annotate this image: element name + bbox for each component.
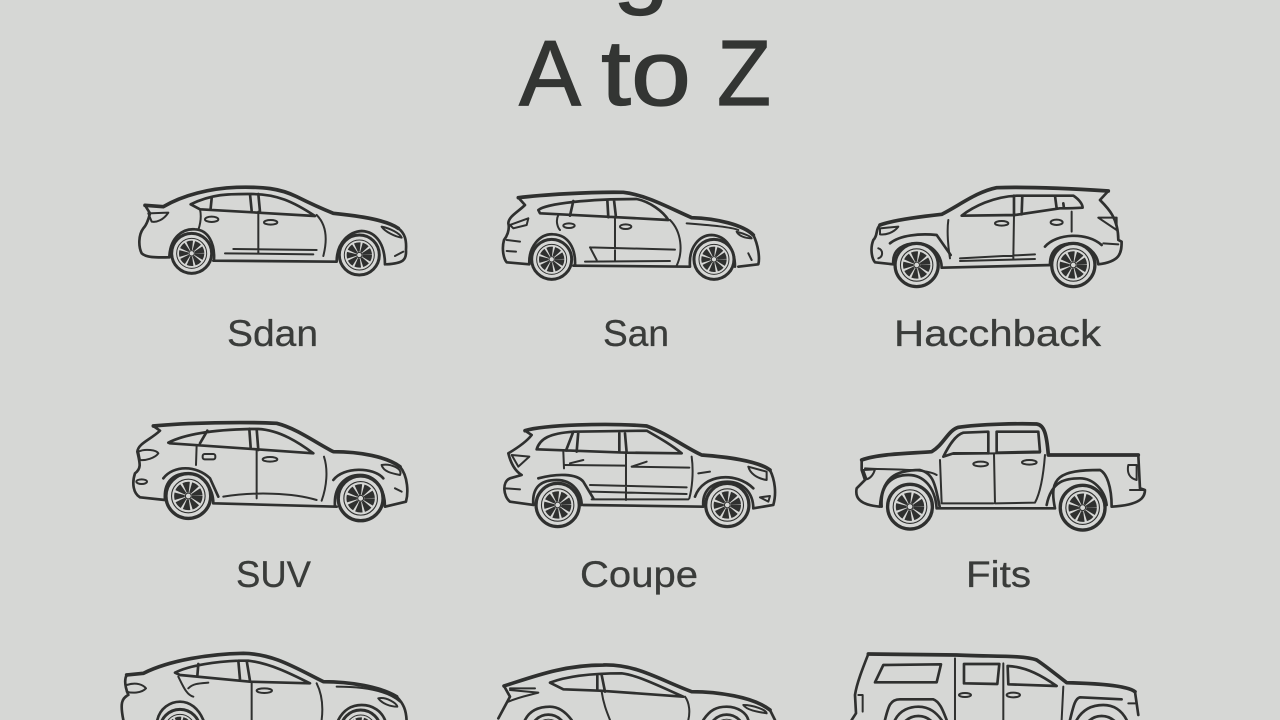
car: bottom middle coupe [498,665,775,720]
label: SUV: SUV [236,554,311,595]
car: sedan [139,187,406,275]
title [519,0,771,125]
label: Fits: Fits [966,554,1031,595]
car: bottom right off-road SUV [852,654,1138,720]
car: wagon [503,192,759,279]
car: bottom left sedan [122,653,407,720]
label: Sdan: Sdan [227,313,318,354]
title: A [519,21,581,125]
car: pickup truck [856,424,1145,530]
label: San: San [603,313,669,354]
title: to [601,21,691,125]
label: Hacchback: Hacchback [894,313,1102,354]
car: large SUV [504,424,775,527]
title: Z [717,21,771,125]
label: Coupe: Coupe [580,554,698,595]
car: hatchback crossover [872,187,1122,287]
car: SUV [133,423,407,521]
